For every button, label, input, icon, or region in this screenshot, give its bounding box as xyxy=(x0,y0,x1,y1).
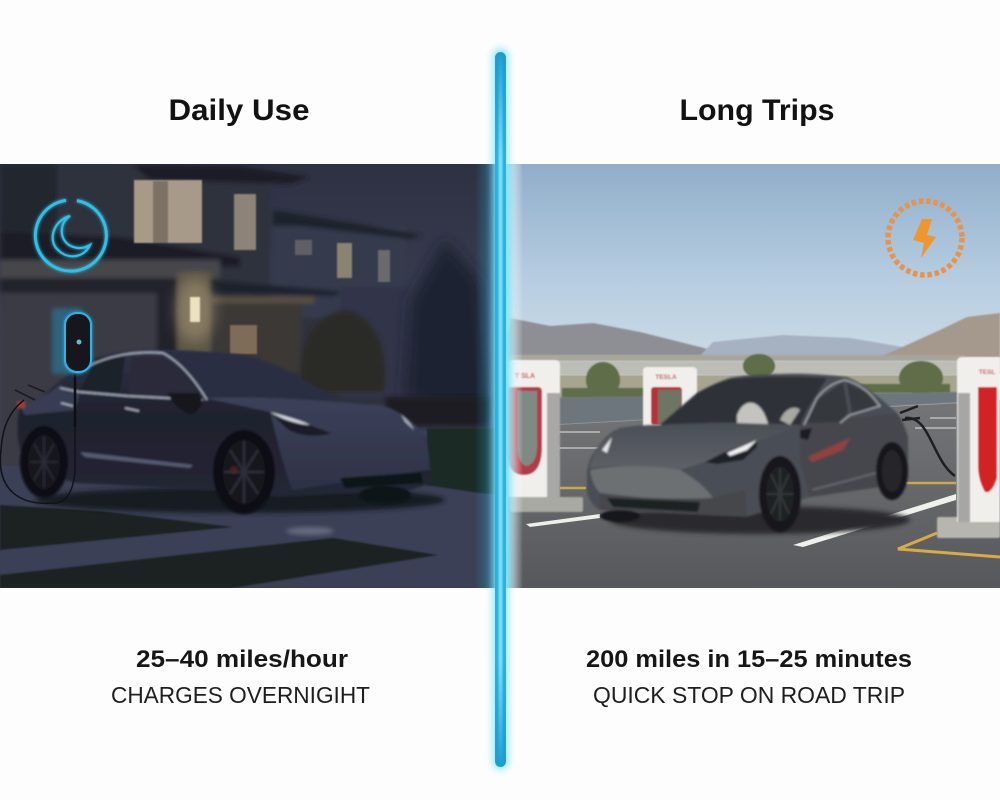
charger pedestal right xyxy=(937,357,1000,538)
windshield xyxy=(198,381,336,402)
lawn behind xyxy=(427,428,495,494)
front side window xyxy=(128,357,203,400)
heading: Daily Use: Daily Use xyxy=(168,94,310,127)
charger pedestal middle xyxy=(643,367,697,430)
rear side window xyxy=(847,383,878,413)
roadside scrub xyxy=(559,374,958,398)
caption: Long Trips xyxy=(586,646,912,708)
car body xyxy=(587,374,908,517)
headlight xyxy=(270,412,331,436)
windshield xyxy=(660,377,827,425)
lower bumper xyxy=(600,490,747,517)
rear wheel xyxy=(20,426,68,498)
headlight xyxy=(705,440,757,464)
rear quarter highlight xyxy=(20,385,80,415)
near front wheel xyxy=(600,510,640,522)
car body xyxy=(18,350,432,497)
rear side window xyxy=(80,357,125,393)
charging cable xyxy=(0,400,76,504)
mountains xyxy=(505,313,1000,358)
long trips speed: 200 miles in 15–25 minutes xyxy=(586,646,912,673)
far front wheel xyxy=(359,486,411,504)
daily use speed: 25–40 miles/hour xyxy=(136,646,348,673)
icon: lightning in dotted ring xyxy=(888,201,962,275)
charger pedestal middle: TESLA xyxy=(655,374,677,381)
intake xyxy=(607,498,700,512)
hood and nose xyxy=(205,397,430,490)
divider: glowing neon bar xyxy=(492,48,509,770)
charger pedestal left: T SLA xyxy=(515,373,535,380)
rocker line xyxy=(812,472,880,490)
panel: supercharging on a road trip xyxy=(500,164,1000,588)
heading: Long Trips: Long Trips xyxy=(680,94,834,127)
door panels xyxy=(800,413,908,497)
supercharged car shadow xyxy=(610,506,910,534)
car shadow xyxy=(35,487,445,513)
night sky xyxy=(0,164,500,588)
mirror xyxy=(800,428,812,440)
hood xyxy=(590,424,800,470)
fade from divider xyxy=(505,164,523,588)
icon: wall charger xyxy=(52,308,91,374)
lit windows xyxy=(134,180,390,354)
charger pedestal left xyxy=(508,360,583,512)
day sky xyxy=(500,164,1000,374)
house xyxy=(0,164,423,470)
rear wheel xyxy=(876,442,908,500)
driveway xyxy=(2,465,488,495)
bumper intake xyxy=(340,472,423,488)
lawn strips xyxy=(0,505,233,550)
trees xyxy=(301,310,385,392)
grey nose xyxy=(590,466,713,499)
daily use note: CHARGES OVERNIGIHT xyxy=(111,682,370,708)
wall lamp xyxy=(175,278,215,342)
caption: Daily Use xyxy=(111,646,370,708)
door highlights xyxy=(80,452,193,468)
driver interior xyxy=(737,403,768,424)
trees xyxy=(562,354,950,398)
fade toward divider xyxy=(477,164,495,588)
night car xyxy=(17,350,432,514)
panel: home charging at night xyxy=(0,164,500,588)
front wheel xyxy=(213,430,275,514)
cable to right charger xyxy=(905,418,955,476)
chrome line xyxy=(804,380,880,425)
asphalt xyxy=(500,400,1000,588)
door reflection xyxy=(808,438,850,462)
overpass xyxy=(505,355,965,361)
front wheel xyxy=(759,456,801,532)
taillight xyxy=(17,401,25,408)
icon: moon in ring xyxy=(35,200,106,271)
barrier xyxy=(505,392,960,428)
day car xyxy=(587,374,908,532)
long trips note: QUICK STOP ON ROAD TRIP xyxy=(593,682,905,708)
chrome line xyxy=(60,352,207,400)
mirror xyxy=(167,393,203,414)
parking lines xyxy=(525,418,1000,557)
front side window xyxy=(807,382,848,423)
charger pedestal right: TESL xyxy=(979,369,995,376)
